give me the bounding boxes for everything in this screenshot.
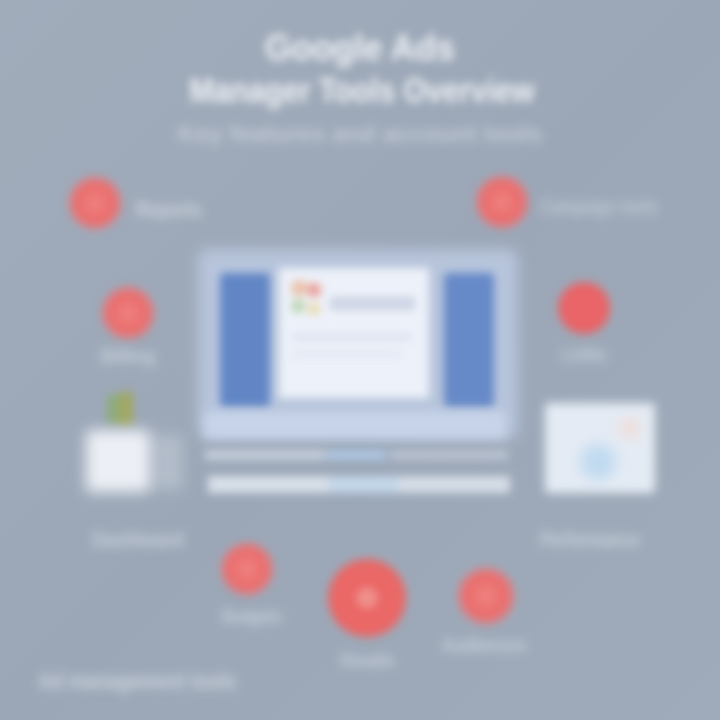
laptop illustration xyxy=(198,249,518,439)
right card chart xyxy=(580,418,640,480)
laptop screen xyxy=(279,268,429,398)
title xyxy=(190,27,535,110)
screen text xyxy=(292,297,415,357)
laptop left blue panel xyxy=(220,273,270,407)
icon: bottom left circle xyxy=(221,543,273,595)
subtitle: Key features and account tools xyxy=(178,121,542,148)
callout: bottom left xyxy=(221,543,282,628)
icon: bottom right circle xyxy=(458,568,514,624)
laptop right blue panel xyxy=(444,273,494,407)
label: bottom right: Audiences xyxy=(442,635,526,657)
footer note: Ad management tools xyxy=(38,668,236,695)
callout: bottom right xyxy=(442,568,526,657)
callout: top right xyxy=(476,176,658,228)
right card xyxy=(540,403,655,552)
label: middle right: Links xyxy=(562,344,606,366)
left card icon: colored blocks xyxy=(107,392,133,426)
label: bottom center: Goals xyxy=(340,650,394,672)
callout: top left xyxy=(69,177,202,229)
icon: bottom center circle xyxy=(328,559,406,637)
label: middle left: Billing xyxy=(100,346,156,368)
icon: top right circle xyxy=(476,176,528,228)
icon: top left circle xyxy=(69,177,121,229)
label: bottom left: Budgets xyxy=(222,606,282,628)
left card label: Dashboard xyxy=(92,527,184,552)
screen logo xyxy=(291,280,321,315)
laptop frame xyxy=(198,249,518,439)
icon: middle right circle xyxy=(558,282,610,334)
title: Manager Tools Overview xyxy=(190,72,535,110)
icon: middle left circle xyxy=(102,287,154,339)
text bars under laptop xyxy=(205,450,510,493)
label: top right: Campaign tools xyxy=(540,194,658,219)
right card label: Performance xyxy=(540,527,640,552)
laptop base xyxy=(205,412,505,438)
callout: middle right xyxy=(558,282,610,366)
label: top left: Reports xyxy=(136,197,202,222)
callout: bottom center xyxy=(328,559,406,672)
title: Google Ads xyxy=(265,27,455,68)
callout: middle left xyxy=(100,287,156,368)
left card xyxy=(86,392,184,552)
left card body xyxy=(86,430,183,492)
right card body xyxy=(545,403,655,493)
